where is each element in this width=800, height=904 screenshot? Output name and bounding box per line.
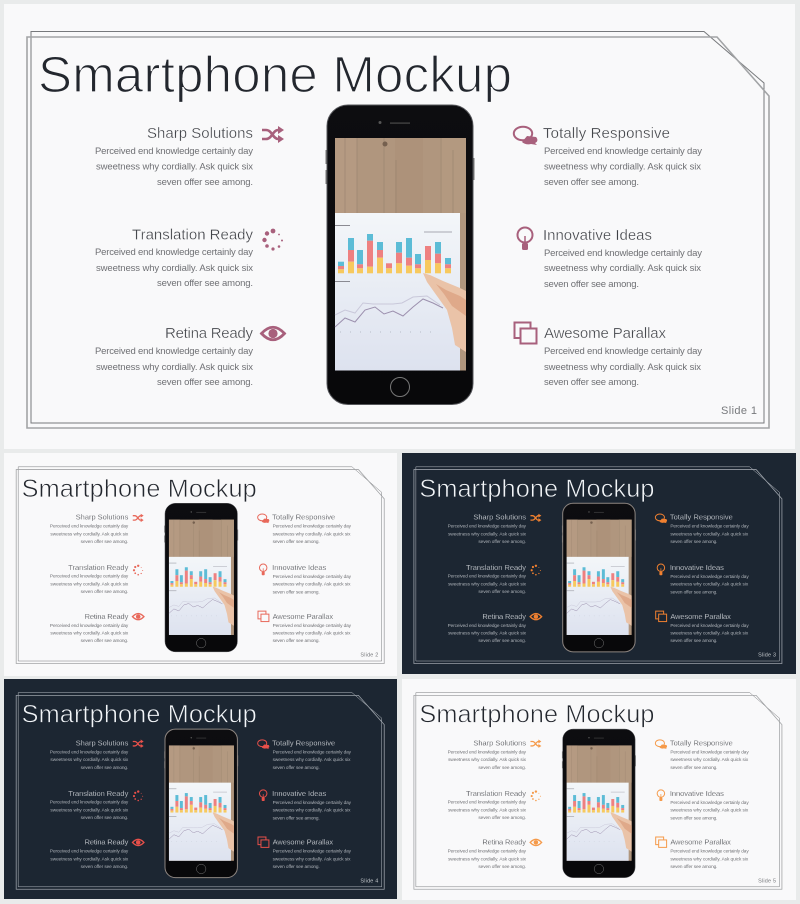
- feature: Retina Ready: sweetness why cordially. Ask quick six: [50, 857, 129, 862]
- icon: eye: [530, 839, 542, 846]
- title: Smartphone Mockup: [38, 46, 512, 103]
- icon: loading dots: [531, 565, 541, 575]
- feature: Retina Ready: [448, 612, 527, 643]
- feature: Translation Ready: seven offer see among.: [478, 815, 526, 820]
- slide number: Slide 4: [360, 878, 378, 884]
- feature: Translation Ready: [95, 226, 254, 289]
- feature: Innovative Ideas: Perceived end knowledge certainly day: [273, 574, 352, 579]
- feature: Totally Responsive: sweetness why cordially. Ask quick six: [273, 757, 351, 762]
- feature: Awesome Parallax: sweetness why cordially. Ask quick six: [273, 631, 351, 636]
- feature: Innovative Ideas: Perceived end knowledge certainly day: [670, 800, 749, 805]
- feature: Retina Ready: Retina Ready: [482, 612, 526, 621]
- feature: Retina Ready: Retina Ready: [85, 838, 129, 847]
- feature: Totally Responsive: Totally Responsive: [670, 738, 733, 747]
- feature: Sharp Solutions: Perceived end knowledge certainly day: [448, 749, 527, 754]
- icon: shuffle: [133, 739, 144, 748]
- feature: Sharp Solutions: sweetness why cordially. Ask quick six: [50, 757, 129, 762]
- feature: Totally Responsive: seven offer see among.: [273, 765, 320, 770]
- feature: Awesome Parallax: [670, 612, 749, 643]
- feature: Retina Ready: Perceived end knowledge certainly day: [50, 849, 129, 854]
- feature: Innovative Ideas: [670, 563, 749, 595]
- feature: Totally Responsive: Totally Responsive: [670, 513, 733, 522]
- icon: loading dots: [133, 790, 143, 801]
- feature: Retina Ready: seven offer see among.: [81, 638, 128, 643]
- feature: Innovative Ideas: sweetness why cordially. Ask quick six: [544, 263, 701, 274]
- icon: eye: [133, 614, 144, 620]
- feature: Awesome Parallax: Perceived end knowledge certainly day: [670, 849, 749, 854]
- feature: Retina Ready: Perceived end knowledge certainly day: [50, 623, 129, 628]
- feature: Retina Ready: Retina Ready: [85, 612, 129, 621]
- feature: Translation Ready: Translation Ready: [68, 563, 129, 572]
- title: Smartphone Mockup: [419, 701, 654, 729]
- feature: Innovative Ideas: sweetness why cordially. Ask quick six: [273, 807, 351, 812]
- feature: Innovative Ideas: Innovative Ideas: [670, 789, 724, 798]
- icon: shuffle: [530, 514, 541, 522]
- feature: Awesome Parallax: Awesome Parallax: [273, 612, 333, 621]
- feature: Sharp Solutions: Perceived end knowledge certainly day: [95, 146, 253, 157]
- feature: Totally Responsive: Perceived end knowledge certainly day: [273, 524, 352, 529]
- feature: Awesome Parallax: Awesome Parallax: [670, 838, 731, 847]
- feature: Totally Responsive: sweetness why cordially. Ask quick six: [670, 531, 749, 536]
- feature: Totally Responsive: [272, 513, 352, 544]
- feature: Translation Ready: seven offer see among.: [157, 278, 253, 289]
- panel: slide 5 (small light, orange): [402, 679, 796, 900]
- feature: Innovative Ideas: seven offer see among.: [670, 815, 717, 820]
- feature: Awesome Parallax: seven offer see among.: [670, 638, 717, 643]
- feature: Awesome Parallax: seven offer see among.: [670, 864, 717, 869]
- feature: Innovative Ideas: [543, 227, 702, 290]
- feature: Sharp Solutions: Sharp Solutions: [473, 513, 526, 522]
- icon: copy squares: [258, 611, 269, 622]
- feature: Translation Ready: Perceived end knowledge certainly day: [50, 574, 129, 579]
- feature: Sharp Solutions: [95, 125, 253, 188]
- feature: Awesome Parallax: Awesome Parallax: [544, 325, 666, 342]
- feature: Retina Ready: [50, 838, 129, 869]
- feature: Sharp Solutions: seven offer see among.: [157, 177, 253, 188]
- feature: Totally Responsive: Totally Responsive: [543, 125, 670, 142]
- icon: light bulb: [259, 564, 267, 575]
- icon: copy squares: [656, 611, 667, 622]
- feature: Translation Ready: Perceived end knowledge certainly day: [448, 799, 527, 804]
- smartphone mockup: [562, 729, 636, 878]
- feature: Totally Responsive: [670, 738, 749, 770]
- feature: Awesome Parallax: Perceived end knowledge certainly day: [544, 346, 702, 357]
- feature: Innovative Ideas: seven offer see among.: [544, 279, 639, 290]
- feature: Translation Ready: sweetness why cordially. Ask quick six: [448, 807, 527, 812]
- feature: Totally Responsive: Perceived end knowledge certainly day: [544, 146, 702, 157]
- feature: Translation Ready: Translation Ready: [466, 563, 526, 572]
- panel: slide 3 (small dark, orange): [402, 453, 796, 674]
- feature: Totally Responsive: sweetness why cordially. Ask quick six: [273, 531, 351, 536]
- feature: Awesome Parallax: Perceived end knowledge certainly day: [273, 849, 352, 854]
- feature: Totally Responsive: sweetness why cordially. Ask quick six: [670, 757, 749, 762]
- feature: Sharp Solutions: seven offer see among.: [478, 765, 526, 770]
- smartphone mockup: [562, 503, 636, 652]
- feature: Innovative Ideas: Innovative Ideas: [543, 227, 652, 244]
- title: Smartphone Mockup: [419, 475, 654, 503]
- icon: copy squares: [258, 837, 269, 847]
- feature: Sharp Solutions: Perceived end knowledge certainly day: [448, 524, 527, 529]
- feature: Totally Responsive: Perceived end knowledge certainly day: [273, 749, 352, 754]
- feature: Awesome Parallax: seven offer see among.: [544, 377, 639, 388]
- feature: Retina Ready: Perceived end knowledge certainly day: [448, 623, 527, 628]
- feature: Innovative Ideas: sweetness why cordially. Ask quick six: [670, 807, 749, 812]
- feature: Retina Ready: Perceived end knowledge certainly day: [448, 849, 527, 854]
- feature: Translation Ready: seven offer see among.: [81, 589, 128, 594]
- feature: Translation Ready: sweetness why cordially. Ask quick six: [50, 807, 129, 812]
- feature: Innovative Ideas: Innovative Ideas: [272, 563, 326, 572]
- icon: copy squares: [514, 322, 536, 344]
- feature: Sharp Solutions: Perceived end knowledge certainly day: [50, 524, 129, 529]
- feature: Translation Ready: [448, 563, 527, 594]
- feature: Sharp Solutions: Sharp Solutions: [473, 738, 526, 747]
- feature: Sharp Solutions: sweetness why cordially. Ask quick six: [96, 162, 253, 172]
- feature: Translation Ready: sweetness why cordially. Ask quick six: [96, 263, 253, 274]
- feature: Retina Ready: sweetness why cordially. Ask quick six: [448, 631, 527, 636]
- feature: Awesome Parallax: [544, 325, 702, 388]
- icon: light bulb: [259, 790, 267, 801]
- panel: slide 2 (small light, coral): [4, 453, 397, 676]
- feature: Sharp Solutions: sweetness why cordially. Ask quick six: [50, 531, 129, 536]
- feature: Innovative Ideas: Innovative Ideas: [272, 789, 326, 798]
- feature: Totally Responsive: Totally Responsive: [272, 513, 335, 522]
- feature: Innovative Ideas: [272, 563, 352, 595]
- feature: Awesome Parallax: [670, 838, 749, 869]
- feature: Retina Ready: [448, 838, 527, 869]
- feature: Awesome Parallax: sweetness why cordially. Ask quick six: [670, 631, 749, 636]
- feature: Translation Ready: Translation Ready: [466, 789, 526, 798]
- feature: Innovative Ideas: Innovative Ideas: [670, 563, 724, 572]
- feature: Sharp Solutions: [448, 738, 527, 770]
- icon: speech bubbles: [655, 514, 667, 523]
- feature: Sharp Solutions: [448, 513, 527, 544]
- feature: Totally Responsive: seven offer see among.: [670, 765, 717, 770]
- feature: Innovative Ideas: sweetness why cordially. Ask quick six: [670, 582, 749, 587]
- feature: Totally Responsive: [670, 513, 749, 544]
- feature: Totally Responsive: seven offer see among.: [670, 539, 717, 544]
- feature: Retina Ready: seven offer see among.: [157, 377, 253, 388]
- feature: Awesome Parallax: sweetness why cordially. Ask quick six: [544, 362, 701, 373]
- icon: light bulb: [657, 564, 665, 575]
- icon: speech bubbles: [258, 740, 269, 749]
- smartphone mockup: [164, 729, 238, 878]
- icon: eye: [530, 614, 542, 620]
- slide number: Slide 1: [721, 405, 757, 417]
- feature: Translation Ready: sweetness why cordially. Ask quick six: [50, 582, 129, 587]
- feature: Retina Ready: Perceived end knowledge certainly day: [95, 346, 253, 357]
- feature: Sharp Solutions: seven offer see among.: [81, 765, 128, 770]
- feature: Awesome Parallax: [273, 612, 352, 643]
- feature: Innovative Ideas: sweetness why cordially. Ask quick six: [273, 582, 351, 587]
- feature: Translation Ready: [448, 789, 527, 820]
- icon: speech bubbles: [258, 514, 269, 523]
- feature: Awesome Parallax: Perceived end knowledge certainly day: [273, 623, 352, 628]
- icon: loading dots: [531, 790, 541, 801]
- feature: Sharp Solutions: seven offer see among.: [478, 539, 526, 544]
- feature: Sharp Solutions: Sharp Solutions: [76, 513, 129, 522]
- feature: Translation Ready: Perceived end knowledge certainly day: [448, 574, 527, 579]
- feature: Translation Ready: seven offer see among.: [81, 815, 128, 820]
- title: Smartphone Mockup: [22, 701, 257, 729]
- feature: Sharp Solutions: Sharp Solutions: [147, 125, 253, 142]
- icon: speech bubbles: [655, 740, 667, 749]
- feature: Innovative Ideas: [670, 789, 749, 820]
- feature: Retina Ready: seven offer see among.: [478, 638, 526, 643]
- icon: speech bubbles: [514, 127, 537, 145]
- feature: Translation Ready: [50, 789, 129, 820]
- feature: Retina Ready: sweetness why cordially. Ask quick six: [50, 631, 129, 636]
- feature: Totally Responsive: seven offer see among.: [273, 539, 320, 544]
- feature: Totally Responsive: Perceived end knowledge certainly day: [670, 524, 749, 529]
- feature: Retina Ready: sweetness why cordially. Ask quick six: [448, 857, 527, 862]
- feature: Translation Ready: Translation Ready: [132, 226, 254, 244]
- feature: Innovative Ideas: seven offer see among.: [670, 590, 717, 595]
- slide 5 content: [414, 693, 782, 889]
- feature: Sharp Solutions: sweetness why cordially. Ask quick six: [448, 757, 527, 762]
- panel: slide 4 (small dark, red): [4, 679, 397, 899]
- icon: eye: [262, 327, 284, 340]
- feature: Retina Ready: Retina Ready: [482, 838, 526, 847]
- feature: Sharp Solutions: [50, 738, 129, 770]
- slide number: Slide 3: [758, 653, 776, 659]
- feature: Awesome Parallax: Awesome Parallax: [273, 838, 333, 847]
- feature: Innovative Ideas: seven offer see among.: [273, 590, 320, 595]
- feature: Retina Ready: [95, 325, 254, 388]
- panel: slide 1 (large light): [4, 4, 795, 449]
- feature: Translation Ready: Perceived end knowledge certainly day: [95, 247, 253, 258]
- smartphone mockup: [326, 105, 474, 404]
- icon: shuffle: [133, 514, 144, 522]
- feature: Awesome Parallax: seven offer see among.: [273, 864, 320, 869]
- feature: Sharp Solutions: sweetness why cordially. Ask quick six: [448, 531, 527, 536]
- feature: Sharp Solutions: Sharp Solutions: [76, 738, 129, 747]
- feature: Sharp Solutions: seven offer see among.: [81, 539, 128, 544]
- feature: Sharp Solutions: [50, 513, 129, 544]
- feature: Totally Responsive: seven offer see among.: [544, 177, 639, 188]
- feature: Innovative Ideas: Perceived end knowledge certainly day: [273, 800, 352, 805]
- feature: Totally Responsive: sweetness why cordially. Ask quick six: [544, 162, 701, 172]
- icon: copy squares: [656, 837, 667, 847]
- feature: Translation Ready: Perceived end knowledge certainly day: [50, 799, 129, 804]
- icon: eye: [133, 839, 144, 846]
- feature: Retina Ready: sweetness why cordially. Ask quick six: [96, 362, 253, 373]
- icon: shuffle: [530, 739, 541, 748]
- slide 4 content: [16, 693, 384, 889]
- feature: Totally Responsive: [543, 125, 702, 188]
- icon: loading dots: [262, 229, 283, 251]
- feature: Awesome Parallax: sweetness why cordially. Ask quick six: [273, 857, 351, 862]
- feature: Retina Ready: Retina Ready: [165, 325, 254, 342]
- feature: Retina Ready: seven offer see among.: [81, 864, 128, 869]
- slide number: Slide 2: [360, 653, 378, 659]
- slide number: Slide 5: [758, 878, 776, 884]
- feature: Totally Responsive: [272, 738, 352, 770]
- feature: Innovative Ideas: Perceived end knowledge certainly day: [670, 574, 749, 579]
- feature: Sharp Solutions: Perceived end knowledge certainly day: [50, 749, 129, 754]
- icon: shuffle: [262, 126, 284, 143]
- smartphone mockup: [164, 503, 238, 652]
- feature: Innovative Ideas: Perceived end knowledge certainly day: [544, 248, 702, 259]
- feature: Awesome Parallax: [273, 838, 352, 869]
- feature: Awesome Parallax: Perceived end knowledge certainly day: [670, 623, 749, 628]
- feature: Translation Ready: seven offer see among.: [478, 589, 526, 594]
- title: Smartphone Mockup: [22, 475, 257, 503]
- feature: Totally Responsive: Totally Responsive: [272, 738, 335, 747]
- feature: Retina Ready: seven offer see among.: [478, 864, 526, 869]
- slide 1 content: [27, 32, 769, 428]
- feature: Awesome Parallax: Awesome Parallax: [670, 612, 731, 621]
- feature: Totally Responsive: Perceived end knowledge certainly day: [670, 749, 749, 754]
- feature: Translation Ready: [50, 563, 129, 594]
- icon: light bulb: [518, 228, 532, 250]
- feature: Retina Ready: [50, 612, 129, 643]
- slide 2 content: [16, 467, 384, 663]
- feature: Translation Ready: sweetness why cordially. Ask quick six: [448, 582, 527, 587]
- feature: Innovative Ideas: [272, 789, 352, 820]
- icon: loading dots: [133, 565, 143, 575]
- feature: Awesome Parallax: sweetness why cordially. Ask quick six: [670, 857, 749, 862]
- feature: Translation Ready: Translation Ready: [68, 789, 129, 798]
- feature: Awesome Parallax: seven offer see among.: [273, 638, 320, 643]
- slide 3 content: [414, 467, 782, 663]
- feature: Innovative Ideas: seven offer see among.: [273, 815, 320, 820]
- icon: light bulb: [657, 790, 665, 801]
